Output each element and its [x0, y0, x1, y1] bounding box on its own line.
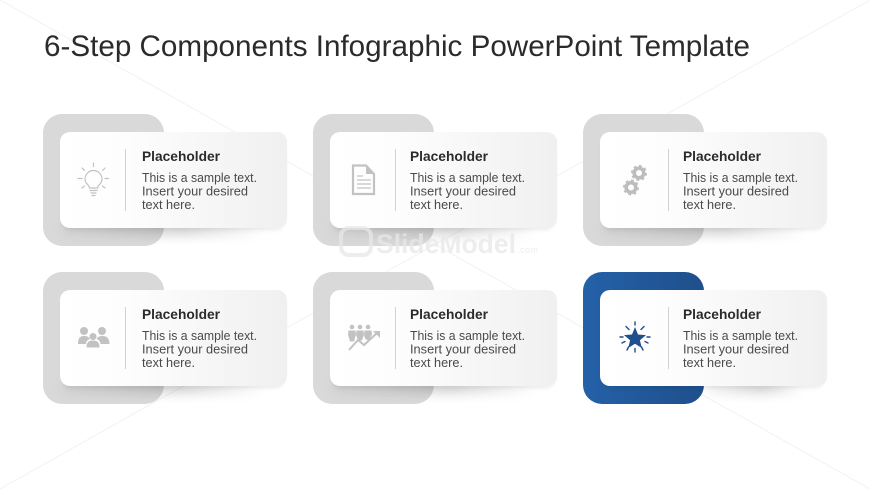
text 2: This is a sample text.: [410, 170, 525, 185]
icon: lightbulb: [78, 163, 108, 196]
text 4: text here.: [142, 355, 195, 370]
heading 3: Placeholder: [683, 148, 762, 164]
text 3: text here.: [683, 197, 736, 212]
text 5: This is a sample text.: [410, 328, 525, 343]
text 3: This is a sample text.: [683, 170, 798, 185]
text 1: This is a sample text.: [142, 170, 257, 185]
panel: step 1 lightbulb: [43, 114, 287, 246]
title: 6-Step Components Infographic PowerPoint Template: [44, 30, 750, 63]
panel: step 6 star highlighted: [583, 272, 827, 404]
icon: document: [353, 166, 374, 194]
text 4: This is a sample text.: [142, 328, 257, 343]
text 2: Insert your desired: [410, 184, 516, 198]
text 6: This is a sample text.: [683, 328, 798, 343]
panel: step 2 document: [313, 114, 557, 246]
icon: gears: [624, 166, 646, 194]
text 1: Insert your desired: [142, 184, 248, 198]
text 3: Insert your desired: [683, 184, 789, 198]
text 6: Insert your desired: [683, 342, 789, 356]
text 6: text here.: [683, 355, 736, 370]
icon: people with growth arrow: [348, 325, 380, 350]
watermark: .com: [517, 245, 538, 255]
icon: star: [620, 322, 650, 352]
panel: step 5 growth: [313, 272, 557, 404]
text 5: Insert your desired: [410, 342, 516, 356]
heading 6: Placeholder: [683, 306, 762, 322]
heading 1: Placeholder: [142, 148, 221, 164]
text 2: text here.: [410, 197, 463, 212]
watermark: SlideModel: [376, 229, 516, 259]
icon: team: [78, 327, 110, 348]
heading 4: Placeholder: [142, 306, 221, 322]
text 5: text here.: [410, 355, 463, 370]
panel: step 4 team: [43, 272, 287, 404]
heading 2: Placeholder: [410, 148, 489, 164]
panel: step 3 gears: [583, 114, 827, 246]
text 4: Insert your desired: [142, 342, 248, 356]
heading 5: Placeholder: [410, 306, 489, 322]
text 1: text here.: [142, 197, 195, 212]
